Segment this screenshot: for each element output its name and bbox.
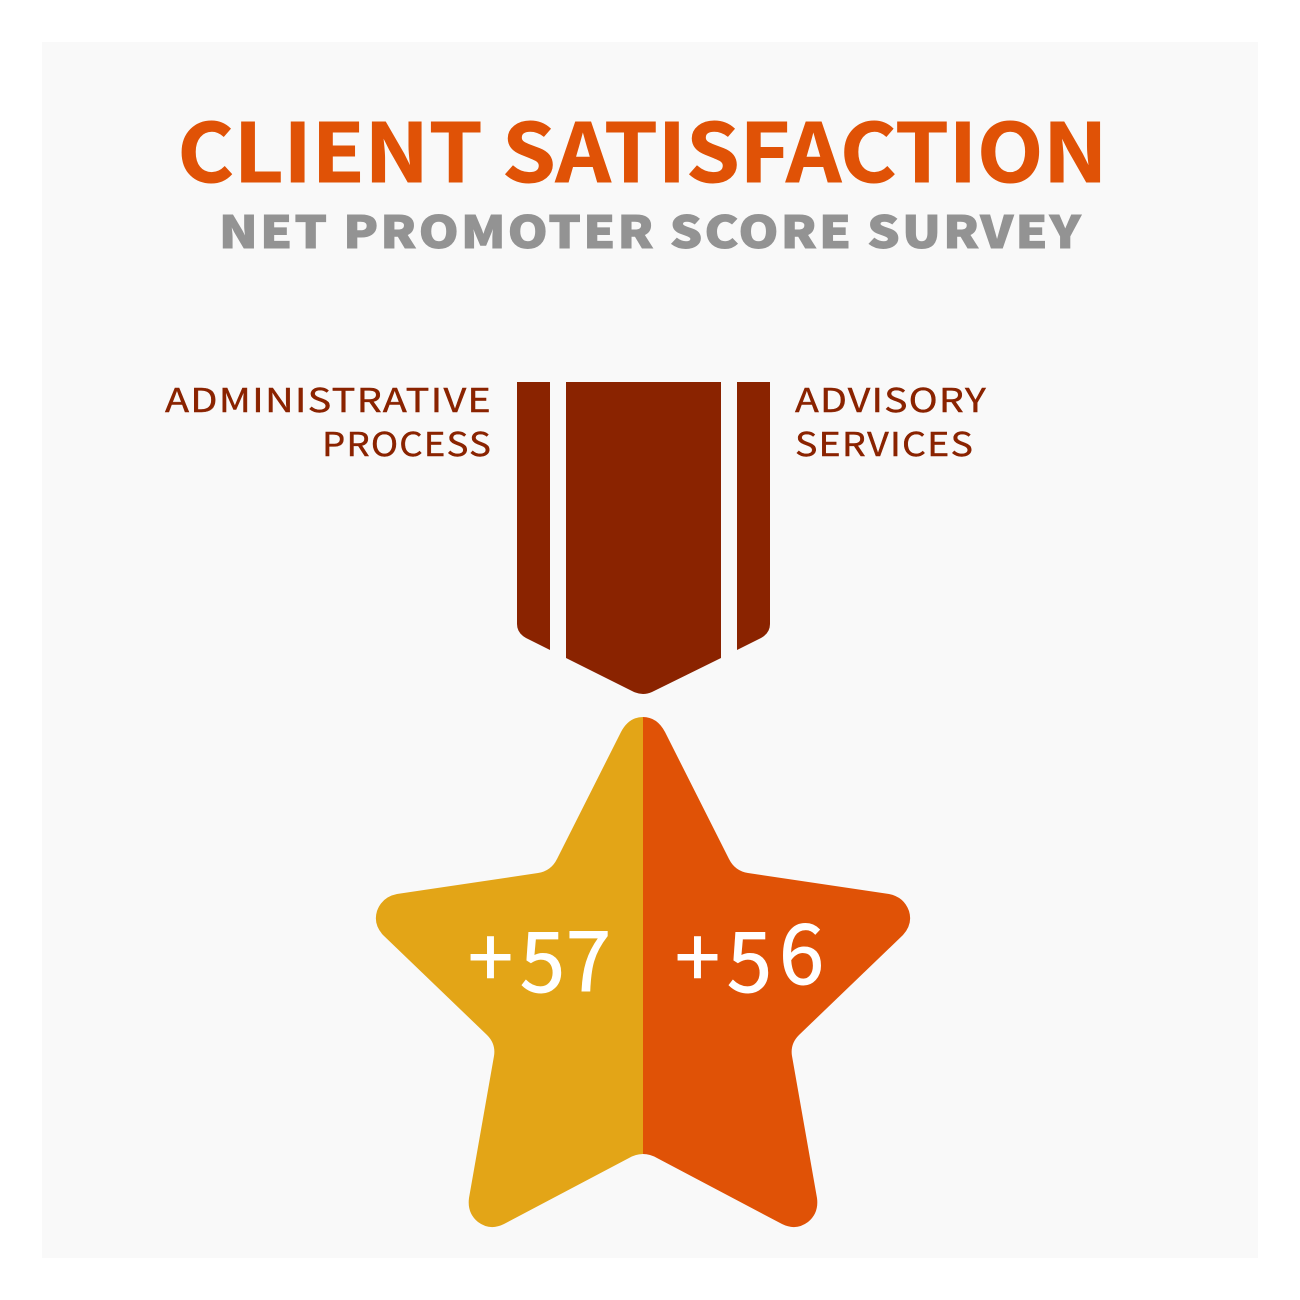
label: advisory services: SERVICES [795, 418, 974, 466]
icon: medal star [376, 717, 910, 1227]
label: administrative process: PROCESS [322, 418, 492, 466]
star left half [376, 717, 643, 1227]
score: +56: +56 [675, 891, 824, 1016]
star right half [643, 717, 910, 1227]
label: administrative process: ADMINISTRATIVE [165, 374, 492, 422]
title: CLIENT SATISFACTION [178, 89, 1108, 206]
icon: medal ribbon [517, 382, 770, 694]
label: administrative process [165, 374, 492, 466]
label: advisory services [795, 374, 987, 466]
score: +57: +57 [468, 894, 611, 1016]
subtitle: NET PROMOTER SCORE SURVEY [219, 197, 1083, 261]
label: advisory services: ADVISORY [795, 374, 987, 422]
